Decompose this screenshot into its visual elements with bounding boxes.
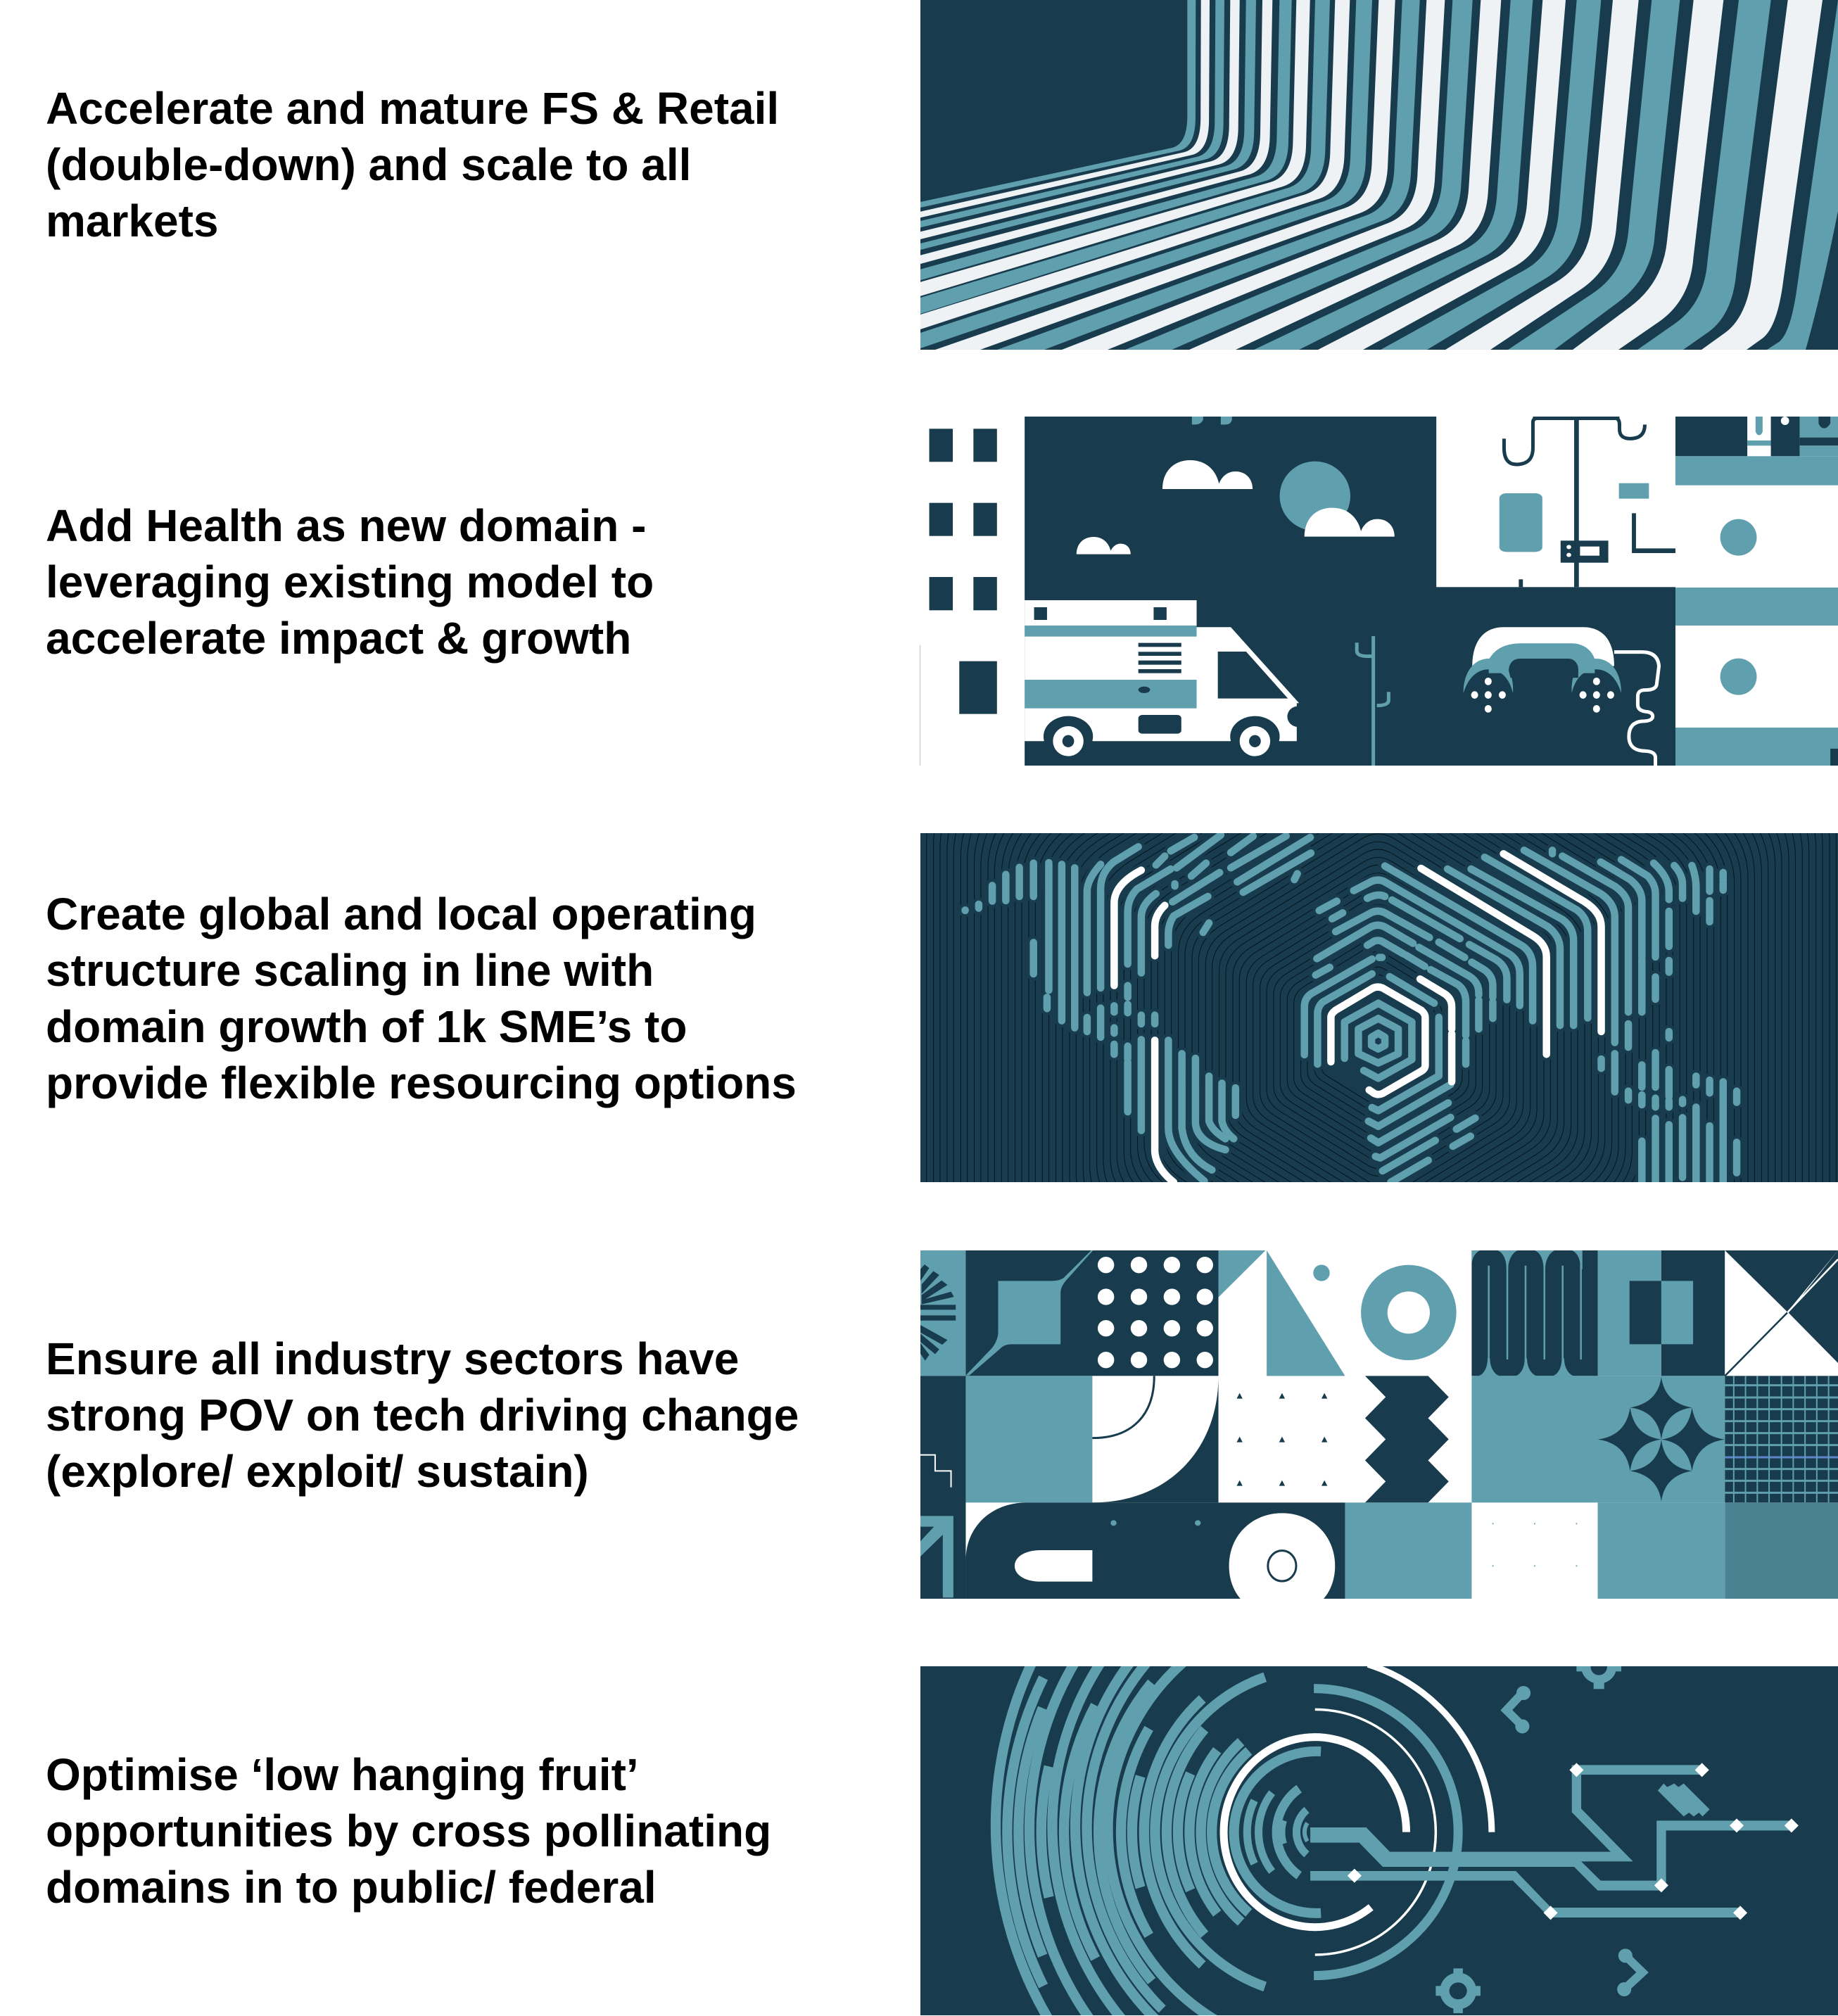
text block: industry sectors: (explore/ exploit/ sustain) [46,1446,589,1497]
IV stand [1500,417,1675,587]
panel: perspective stripes illustration [920,0,1838,350]
right arcs [1224,1664,1492,1975]
text block: add health [46,500,654,664]
text block: low hanging fruit: domains in to public/ federal [46,1862,657,1913]
text block: global and local operating structure [46,889,797,1108]
panel: geometric tiles pattern [920,1250,1838,1599]
telephone [1464,627,1659,766]
tile: left dark strip with step line [920,1376,965,1599]
tile: offset squares [1598,1250,1725,1376]
panel: radar and circuit illustration [920,1666,1838,2015]
text block: global and local operating structure: structure scaling in line with [46,945,654,996]
panel: world map of concentric hexagon lines [920,833,1838,1182]
text block: add health: Add Health as new domain - [46,500,646,551]
sky: clouds and moon [1077,417,1395,554]
tile: stepped teal shape and dots [965,1250,1219,1376]
tile: teal and quarter circle [965,1376,1219,1502]
text block: accelerate and mature [46,83,779,246]
tile: teal field with star motif [1471,1376,1725,1599]
tile: small triangles and zigzag [1236,1376,1449,1502]
right column: blocks and dots [1675,417,1838,766]
text block: add health: leveraging existing model to [46,557,654,607]
panel: health scene illustration [929,417,1838,766]
tile: sunburst [920,1250,965,1376]
text block: low hanging fruit [46,1749,771,1913]
text block: industry sectors: strong POV on tech driving change [46,1390,799,1440]
concentric teal arcs [996,1661,1265,2016]
tile: pill, dots and disc [965,1502,1345,1599]
continents: teal dashes with halo [965,835,1737,1182]
tile: grid of lines [1725,1376,1838,1599]
tile: teal square [1345,1502,1471,1599]
circuit lines [1310,1765,1792,1917]
inner radar arcs [1234,1751,1321,1913]
ambulance [1025,600,1309,758]
tile: meander [1471,1250,1598,1376]
text block: low hanging fruit: Optimise ‘low hanging fruit’ [46,1749,639,1800]
teal pole [1357,636,1388,766]
gears [1435,1649,1621,2013]
background contour lines [920,513,1836,1568]
text block: global and local operating structure: provide flexible resourcing options [46,1058,797,1108]
tile: crossed triangles [1725,1250,1838,1376]
text block: accelerate and mature: Accelerate and mature FS & Retail [46,83,779,134]
text block: global and local operating structure: domain growth of 1k SME’s to [46,1001,687,1052]
text block: global and local operating structure: Create global and local operating [46,889,756,939]
tile: triangles and ring [1219,1250,1457,1376]
text block: accelerate and mature: (double-down) and scale to all [46,139,691,190]
building windows and door [930,429,997,714]
text block: industry sectors [46,1333,799,1497]
tile: white with tiny dots [1492,1523,1577,1566]
text block: low hanging fruit: opportunities by cross pollinating [46,1806,771,1856]
highlighted white contours [1114,854,1602,1182]
white diamond nodes [1348,1763,1799,1920]
chevron connectors [1507,1686,1642,1996]
text block: add health: accelerate impact & growth [46,613,631,664]
text block: accelerate and mature: markets [46,196,218,246]
text block: industry sectors: Ensure all industry sectors have [46,1333,739,1384]
